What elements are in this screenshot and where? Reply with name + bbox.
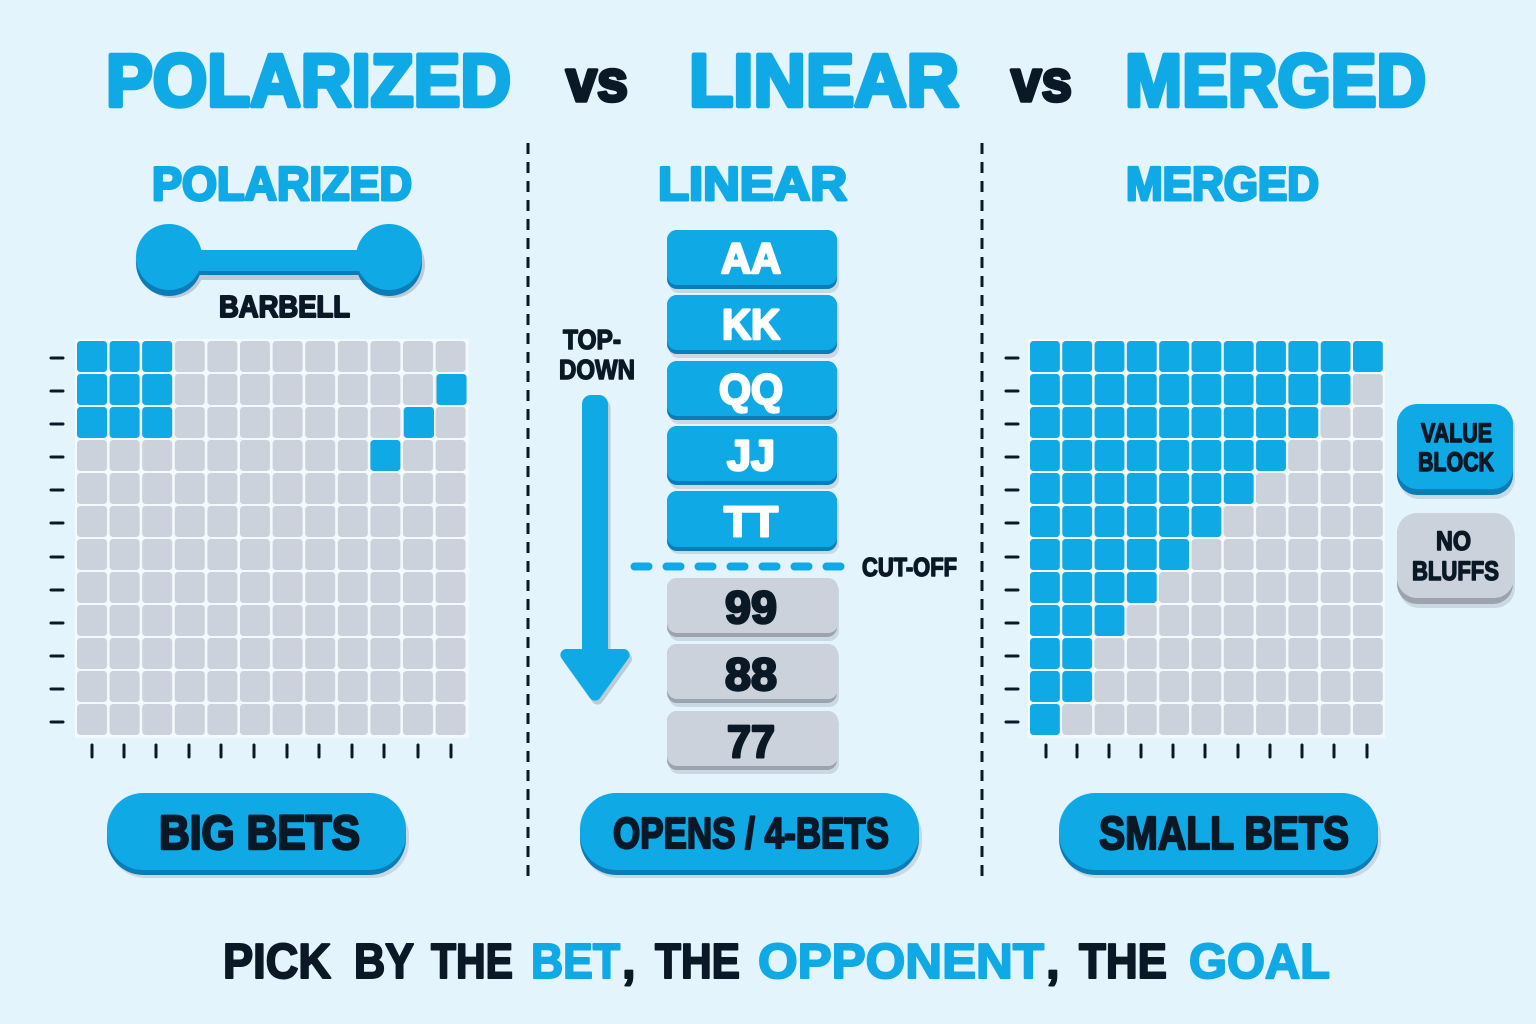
pill: opens / 4-bets [580, 793, 922, 878]
label: top-down: TOP- [563, 324, 621, 355]
footer tagline: THE [1079, 935, 1167, 989]
title: vs [566, 49, 628, 114]
diagonal blue cells [370, 374, 467, 471]
pill: big bets [107, 793, 409, 878]
label: top-down: DOWN [559, 354, 635, 385]
chart: polarized range grid [75, 339, 469, 738]
badge: value block [1397, 404, 1515, 499]
heading: polarized: POLARIZED [152, 157, 412, 210]
footer tagline: GOAL [1189, 935, 1330, 989]
label: top-down [559, 324, 635, 385]
label: barbell: BARBELL [219, 289, 350, 324]
heading: merged: MERGED [1126, 157, 1319, 210]
hand: 99: 99 [725, 582, 777, 633]
hand: TT [667, 491, 839, 554]
title: vs [1011, 49, 1072, 114]
panel: merged [1006, 157, 1515, 878]
chart: merged range grid [1028, 339, 1385, 738]
footer tagline: OPPONENT [758, 935, 1044, 989]
panel: polarized [51, 157, 469, 878]
footer tagline: BET [531, 935, 620, 989]
hand: TT: TT [724, 498, 778, 546]
badge: value block: VALUE [1421, 418, 1492, 448]
title: MERGED [1125, 39, 1426, 122]
hand stack: below cut-off [667, 578, 839, 774]
footer tagline: THE [431, 935, 513, 989]
top-left blue cluster [77, 341, 172, 438]
footer tagline [223, 935, 1330, 989]
hand: 88: 88 [725, 649, 777, 700]
badge: no bluffs [1397, 513, 1515, 608]
pill: big bets: BIG BETS [159, 807, 360, 860]
title: POLARIZED [106, 39, 511, 122]
hand: 88 [667, 644, 839, 707]
hand: AA [667, 230, 839, 293]
panel: linear [559, 157, 957, 878]
hand: 77 [667, 711, 839, 774]
footer tagline: BY [354, 935, 414, 989]
footer tagline: , [1046, 935, 1060, 989]
badge: value block: BLOCK [1418, 447, 1494, 477]
hand: QQ: QQ [719, 366, 783, 414]
hand: KK [667, 295, 839, 358]
footer tagline: THE [655, 935, 740, 989]
badge: no bluffs: BLUFFS [1412, 556, 1499, 586]
hand: 77: 77 [727, 716, 775, 767]
blue staircase [1030, 341, 1383, 737]
hand: KK: KK [722, 301, 780, 349]
pill: small bets: SMALL BETS [1099, 807, 1349, 859]
hand: JJ [667, 426, 839, 489]
hand: AA: AA [721, 235, 781, 283]
pill: small bets [1059, 793, 1381, 878]
cut-off line: CUT-OFF [862, 552, 957, 582]
hand: QQ [667, 361, 839, 424]
axis ticks: merged [1006, 358, 1367, 757]
footer tagline: PICK [223, 935, 331, 989]
hand: JJ: JJ [727, 432, 775, 480]
badge: no bluffs: NO [1436, 526, 1471, 556]
axis ticks: polarized [51, 358, 451, 757]
hand stack: premium hands [667, 230, 839, 554]
hand: 99 [667, 578, 839, 641]
icon: barbell [136, 224, 425, 298]
heading: linear: LINEAR [658, 157, 847, 210]
title: LINEAR [689, 39, 959, 122]
pill: opens / 4-bets: OPENS / 4-BETS [613, 809, 889, 858]
title [106, 39, 1426, 122]
arrow: top-down [560, 395, 632, 705]
footer tagline: , [622, 935, 636, 989]
